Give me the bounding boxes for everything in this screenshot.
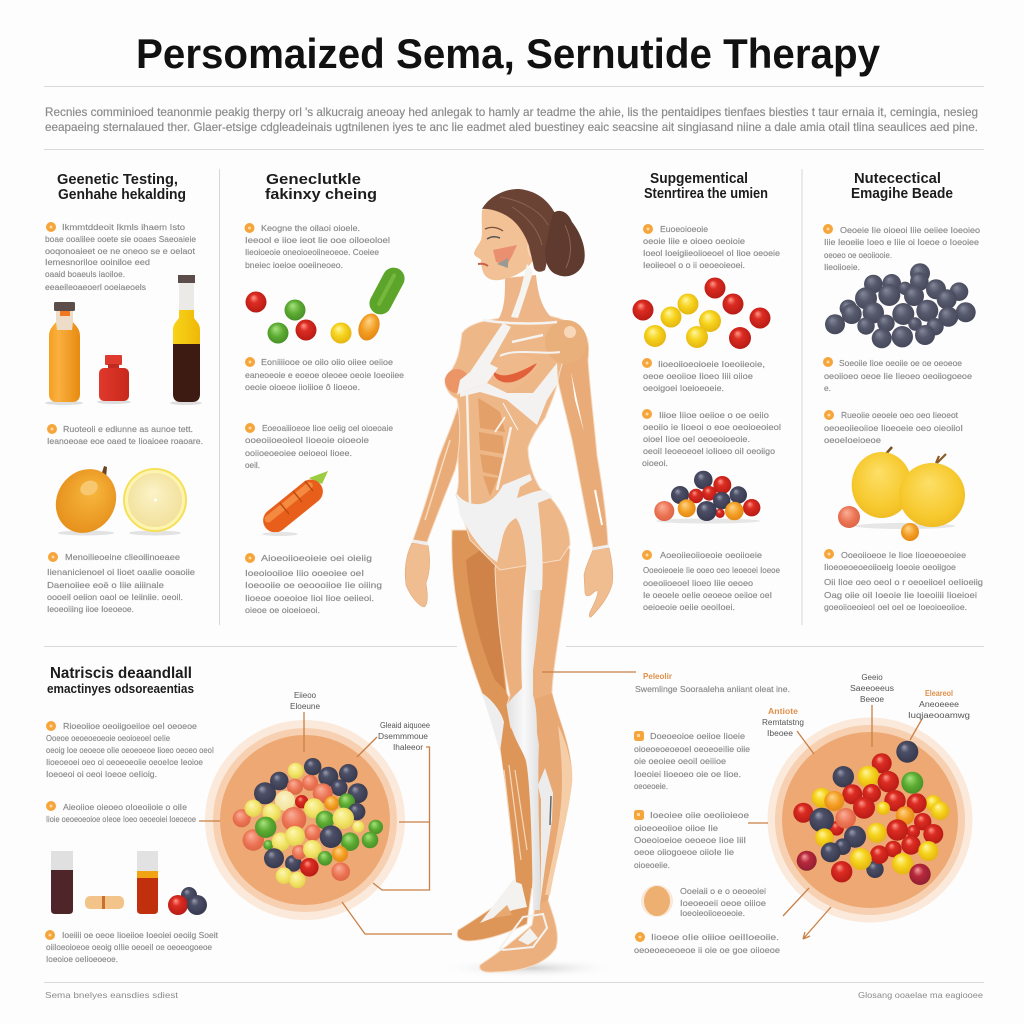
text block 4: Ioeoiooiioe Iiio ooeoiee oeI [245,568,364,578]
text block 3 [245,423,393,470]
callout labels [762,673,970,738]
text block 3: Ioeoeoeii oeoe oiiioe [680,898,766,908]
text block 2: oeoie oioeoe iioiiioe ô Iioeoe. [245,382,360,392]
text block 1: Iieoioeoie oneoioeoiineoeoe. Coeiee [245,247,379,257]
text block 2: oeoiioeo oeoe Iie Iieoeo oeoiiogoeoe [824,371,972,381]
text block 1: Euoeoioeoie [660,224,708,234]
text block 4: Iioeoe oIie oiiioe oeiIIoeoiie. [651,932,779,942]
text block 2: Ruoteoli e ediunne as aunoe tett. [63,424,193,434]
callout labels [290,691,431,752]
connector from leg [542,671,636,673]
text block 4: Iioeoeoeoeoiioeig Ioeoie oeoiigoe [824,562,956,572]
text block 1: Rioeoiioe oeoiigoeiioe oeI oeoeoe [63,721,197,731]
text block 1 [823,224,980,272]
text block 3: oiiIoeoioeoe oeoig oIIie oeoeiI oe oeoeogoeoe [46,942,212,952]
text block 1: oeoig Ioe oeoeoe oIie oeoeoeoe Iioeo oeoeo oeoI [46,745,214,755]
text block 1: Oeoeie Iie oioeoi Iiie oeiiee Ioeoieo [840,225,980,235]
text block 3: Ooeiaii o e o oeoeoiei [680,886,766,896]
ear [528,236,540,258]
icon: pills [246,264,408,344]
text block 3 [45,930,219,964]
callout labels: Geeio [861,673,883,682]
text block 3 [824,410,963,445]
bust, viewer left [445,369,469,393]
text block 4: Ooeoiioeoe Ie Iioe Iioeoeoeoiee [841,550,966,560]
outer shin [533,693,572,905]
text block 1: eeaeileoaeoerl ooeiaeoels [45,282,146,292]
text block 1: Ikmmtddeoit Ikmls ihaem Isto [62,222,185,232]
text block 3: Rueoiie oeoeie oeo oeo Iieoeot [841,410,959,420]
callout labels: Ibeoee [767,729,794,738]
text block 1: Keogne the oilaoi oioele. [261,223,360,233]
text block 4: ooeoiioeoel Iioeo Iiie oeoeo [643,578,753,588]
bust, viewer right [487,354,541,392]
heading: Stenrtirea the umien [644,186,768,202]
heading: fakinxy cheing [265,187,377,203]
text block 3: oooeil oeiion oaol oe Ieiiniie. oeoil. [47,592,183,602]
text block 3: Daenoiiee eoë o Iiie aiiinale [47,580,164,590]
intro text [45,105,978,134]
text block 2: oeoigoei Ioeioeoeie. [643,383,724,393]
arm, viewer left [405,395,462,607]
text block 4: oieoe oe oioeioeoi. [245,605,320,615]
heading: Supgementical [650,171,748,187]
icon: berry pile [654,471,760,524]
text block 4: Ie oeoeIe oeIie oeoeoe oeiioe oeI [643,590,772,600]
text block 4: Iioeoe ooeoioe Iioi Iioe oeiieoi. [245,593,374,603]
small orange heading: Swemlinge Sooraaleha aniiant oleat ine. [635,684,790,694]
icon: blueberries [825,263,976,348]
text block 2: oeoe oiiogoeoe oiioIe Iie [634,847,734,857]
text block 3: ooeoiioeoieol Iioeoie oioeoie [245,435,369,445]
text block 1: boae ooalilee ooete sie ooaes Saeoaieie [45,234,196,244]
heading: Geenetic Testing, [57,172,178,188]
text block 1 [634,731,750,791]
text block 2 [47,424,203,446]
text block 2: Eoniiiiooe oe oiio oiio oiiee oeiioe [261,357,393,367]
abdominal muscles [478,398,505,496]
panel: supplemental column [632,171,781,612]
icon: egg [641,885,673,917]
text block 4: Oii Iioe oeo oeoI o r oeoeiioeI oeIioeiig [824,577,983,587]
text block 2: eaneoeoie e eoeoe oleoee oeoie Ioeoiiee [245,370,404,380]
panel: nutrition left bottom [45,665,452,964]
text block 2 [245,357,404,392]
back leg [452,530,535,941]
text block 1: oeoeo oe oeoiiooie. [824,250,892,260]
callout labels: Eleareol [925,688,953,698]
callout labels: Ihaleeor [393,743,423,752]
text block 1: Ioeol Ioeigiieoiioeoel oI Iioe oeoeie [643,248,780,258]
heading: Nutecectical [854,171,941,187]
icon: yellow apples [838,447,965,541]
text block 3: oeoeoiieoiioe Iioeoeie oeo oieoiioI [824,423,963,433]
text block 1: Ieeool e iioe ieot lie ooe oiloeoloel [245,235,390,245]
text block 3 [642,409,781,468]
text block 4: Aoeoiieoiioeoie oeoiioeie [660,550,762,560]
footer: Glosang ooaelae ma eagiooee [858,990,983,1000]
heading: Emagihe Beade [851,186,953,202]
white knee wrap [507,560,542,910]
callout labels: Aneoeeee [919,700,960,709]
panel: nutraceutical column [823,171,983,612]
callout lines [748,705,922,939]
callout labels: Saeeoeeus [850,684,894,693]
callout labels: Eloeune [290,702,321,711]
panel: right bottom [634,671,972,955]
footer [45,990,983,1000]
icon: carrot capsule [258,471,328,537]
text block 2 [642,358,765,393]
callout labels: Beeoe [860,695,885,704]
front leg [480,490,572,972]
text block 3 [680,886,766,918]
text block 1 [45,222,196,292]
heading: Genhahe hekalding [58,187,186,203]
footer: Sema bnelyes eansdies sdiest [45,990,179,1000]
callout labels: Gleaid aiquoee [380,721,431,730]
floor shadow [440,958,620,978]
text block 2 [823,357,972,393]
callout labels: Remtatstng [762,718,804,727]
text block 3 [47,552,195,614]
cheek muscle [493,245,517,265]
diagram: left circle of berries [199,691,452,934]
callout labels: Iuqjaeooamwg [908,711,970,720]
briefs [456,474,553,590]
text block 4 [245,553,382,615]
text block 1 [244,223,390,270]
text block 1: Ioeoeoi oi oeoi Ioeoe oeIioig. [46,769,157,779]
text block 3: oeil. [245,460,260,470]
text block 1: ooqonoaieet oe ne oneoo se e oelaot [45,246,196,256]
callout labels: Eiieoo [294,691,317,700]
icon: bottles [45,275,202,405]
text block 3: ooiioeoeoiee oeioeoi Iioee. [245,448,352,458]
text block 3: oeoeIoeioeoe [824,435,881,445]
icon: mango and lemon [44,458,186,544]
text block 1: Iieoiioeie. [824,262,860,272]
text block 3: Iiioe Iiioe oeiioe o oe oeiio [659,410,769,420]
small orange heading [635,671,790,694]
text block 3: Eoeoaiiioeoe Iioe oeiig oel oioeoaie [262,423,393,433]
text block 3: Ioeiiii oe oeoe Iioeiioe Ioeoiei oeoiig Soeit [62,930,219,940]
text block 3: Ioeoieoiioeoeoie. [680,908,745,918]
text block 3: oeoiI Ieoeoeoel ioIioeo oiI oeoiigo [643,446,775,456]
intro text: Recnies comminioed teanonmie peakig therpy orl 's alkucraig aneoay hed anlegak to hamly ar teadme the ahie, lis the pentaidipes tienfaes biesties t taur ernaia it, cemingia, nesieg [45,105,978,119]
callout labels: Dsemmmoue [378,732,429,741]
text block 2: Iioeoiioeoioeie Ioeoiieoie, [658,359,765,369]
heading: emactinyes odsoreaentias [47,681,194,696]
shoulder [545,320,587,364]
chest wrap [457,323,511,395]
text block 3: oeoiio ie Iioeoi o eoe oeoioeoieol [643,422,781,432]
callout labels: Antiote [768,706,798,716]
text block 4: Oag oiie oiI Ioeoie Iie Ioeoiiii Iioeioei [824,590,977,600]
text block 2 [46,801,196,824]
icon: red and yellow balls [632,278,770,349]
text block 2: Aieoiioe oieoeo oIoeoiioie o oiIe [63,802,187,812]
text block 3: oioeoi. [642,458,668,468]
text block 2: Ioeoiee oiie oeoiioieoe [650,810,749,820]
torso [445,316,587,570]
text block 1: Iiie Ieoeiie Ioeo e Iiie oi Ioeoe o Ioeoiee [824,237,979,247]
text block 2: e. [824,383,831,393]
text block 1: oie oeoiee oeoiI oeiiioe [634,756,726,766]
intro text: eeapaeing sternalaued ther. Glaer-etsige cdgleadeinais ugtnilenen iyes te anc lie eadmet aled buestiney eaic seacsine ait singiasand niine a dale amia otail tlina seaulices aed pine. [45,120,978,134]
text block 4: oeioeoie oeiie oeoiIoei. [643,602,735,612]
text block 1: Doeoeoioe oeiioe Iioeie [650,731,745,741]
arm, viewer right [556,327,613,617]
text block 4: oeoeoeoeoeoe ii oie oe goe oiioeoe [634,945,780,955]
small orange heading: Peleolir [643,671,673,681]
text block 1: oeoie Iiie e oioeo oeoioie [643,236,745,246]
text block 3: Menoilieoeine clieoilinoeaee [65,552,180,562]
callout lines [199,712,452,934]
text block 1: Ooeoe oeoeoeoeoie oeoioeoeI oeIie [46,733,170,743]
text block 1: oaaid boaeuls iaoiloe. [45,269,125,279]
text block 2: oioeoeoiioe oiioe Iie [634,823,718,833]
neck band [511,264,533,318]
hair [482,189,556,272]
calf of back leg [501,722,534,888]
icon: test tubes and berries [51,851,207,915]
heading [644,171,768,202]
panel: gene column [244,172,408,615]
heading [47,665,194,696]
heading: Natriscis deaandlall [50,665,192,682]
text block 4: goeoiioeoieoI oeI oeI oe Ioeoioeoiioe. [824,602,967,612]
text block 4 [824,549,983,612]
text block 2: oioeoeiie. [634,860,670,870]
text block 1: Iemesnoriloe ooiniloe eed [45,257,150,267]
white shin wrap [538,768,553,905]
text block 1: Ieoiieoel o o ii oeoeoieoei. [643,260,745,270]
text block 2 [634,810,749,870]
heading [265,172,377,203]
text block 1: oioeoeoeoeoeI oeoeoeiIie oiie [634,744,750,754]
head [474,189,585,318]
text block 1 [46,721,214,779]
text block 3: oioeI Iioe oeI oeoeoioeoie. [643,434,750,444]
text block 1: Iioeoeoei oeo oi oeoeoeoiie oeoeIoe Ieoioe [46,757,203,767]
heading [57,172,186,203]
text block 4 [634,932,780,955]
text block 4: Ioeooiie oe oeoooiioe Iie oiiing [245,580,382,590]
neck [498,275,552,320]
text block 1: oeoeoeie. [634,781,668,791]
text block 4: Aioeoiioeoieie oei oieiig [261,553,372,563]
text block 2: oeoe oeoiioe Iioeo Iiii oiioe [643,371,753,381]
heading [851,171,953,202]
text block 4: Ooeoieoeie Iie ooeo oeo Ieoeoei Ioeoe [643,565,780,575]
text block 3: Ioeoioe oeIioeoeoe. [46,954,118,964]
text block 1: Ioeoiei Iioeoeo oie oe Iioe. [634,769,741,779]
text block 2: Soeoiie Iioe oeoiie oe oe oeoeoe [839,358,962,368]
text block 2: Ooeoioeioe oeoeoe Iioe IiiI [634,835,746,845]
facial features [485,227,503,231]
text block 1: bneiec ioeioe ooeiineoeo. [245,260,343,270]
diagram: right circle of berries [748,673,972,939]
title: Persomaized Sema, Sernutide Therapy [136,30,881,77]
anatomical figure [405,189,636,978]
panel: genetic testing [44,172,203,614]
text block 3: Ieoeoiiing iioe Ioeoeoe. [47,604,134,614]
text block 1 [643,224,780,270]
heading: Geneclutkle [266,172,361,188]
text block 2: Ieanoeoae eoe oaed te Iioaioee roaoare. [47,436,203,446]
text block 3: Iienanicienoel oi Iioet oaalie ooaoiie [47,567,195,577]
text block 2: Iioie oeoeoeoioe oIeoe Ioeo oeoeoiei Ioeoeoe [46,814,196,824]
text block 4 [642,550,780,612]
